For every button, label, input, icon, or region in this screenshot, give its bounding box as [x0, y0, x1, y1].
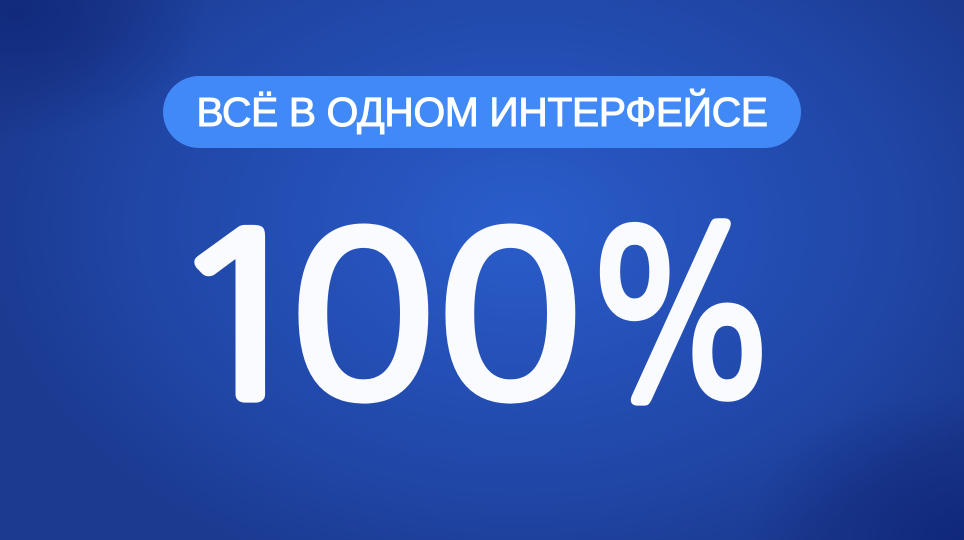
big number: 100% [162, 205, 781, 430]
big number: 100%: % [581, 205, 781, 430]
heading pill [163, 76, 801, 148]
big number: 100%: 0 [436, 205, 583, 430]
big number: 100%: 1 [162, 205, 321, 430]
heading text: ВСЁ В ОДНОМ ИНТЕРФЕЙСЕ [196, 89, 768, 135]
big number: 100%: 0 [288, 205, 436, 430]
